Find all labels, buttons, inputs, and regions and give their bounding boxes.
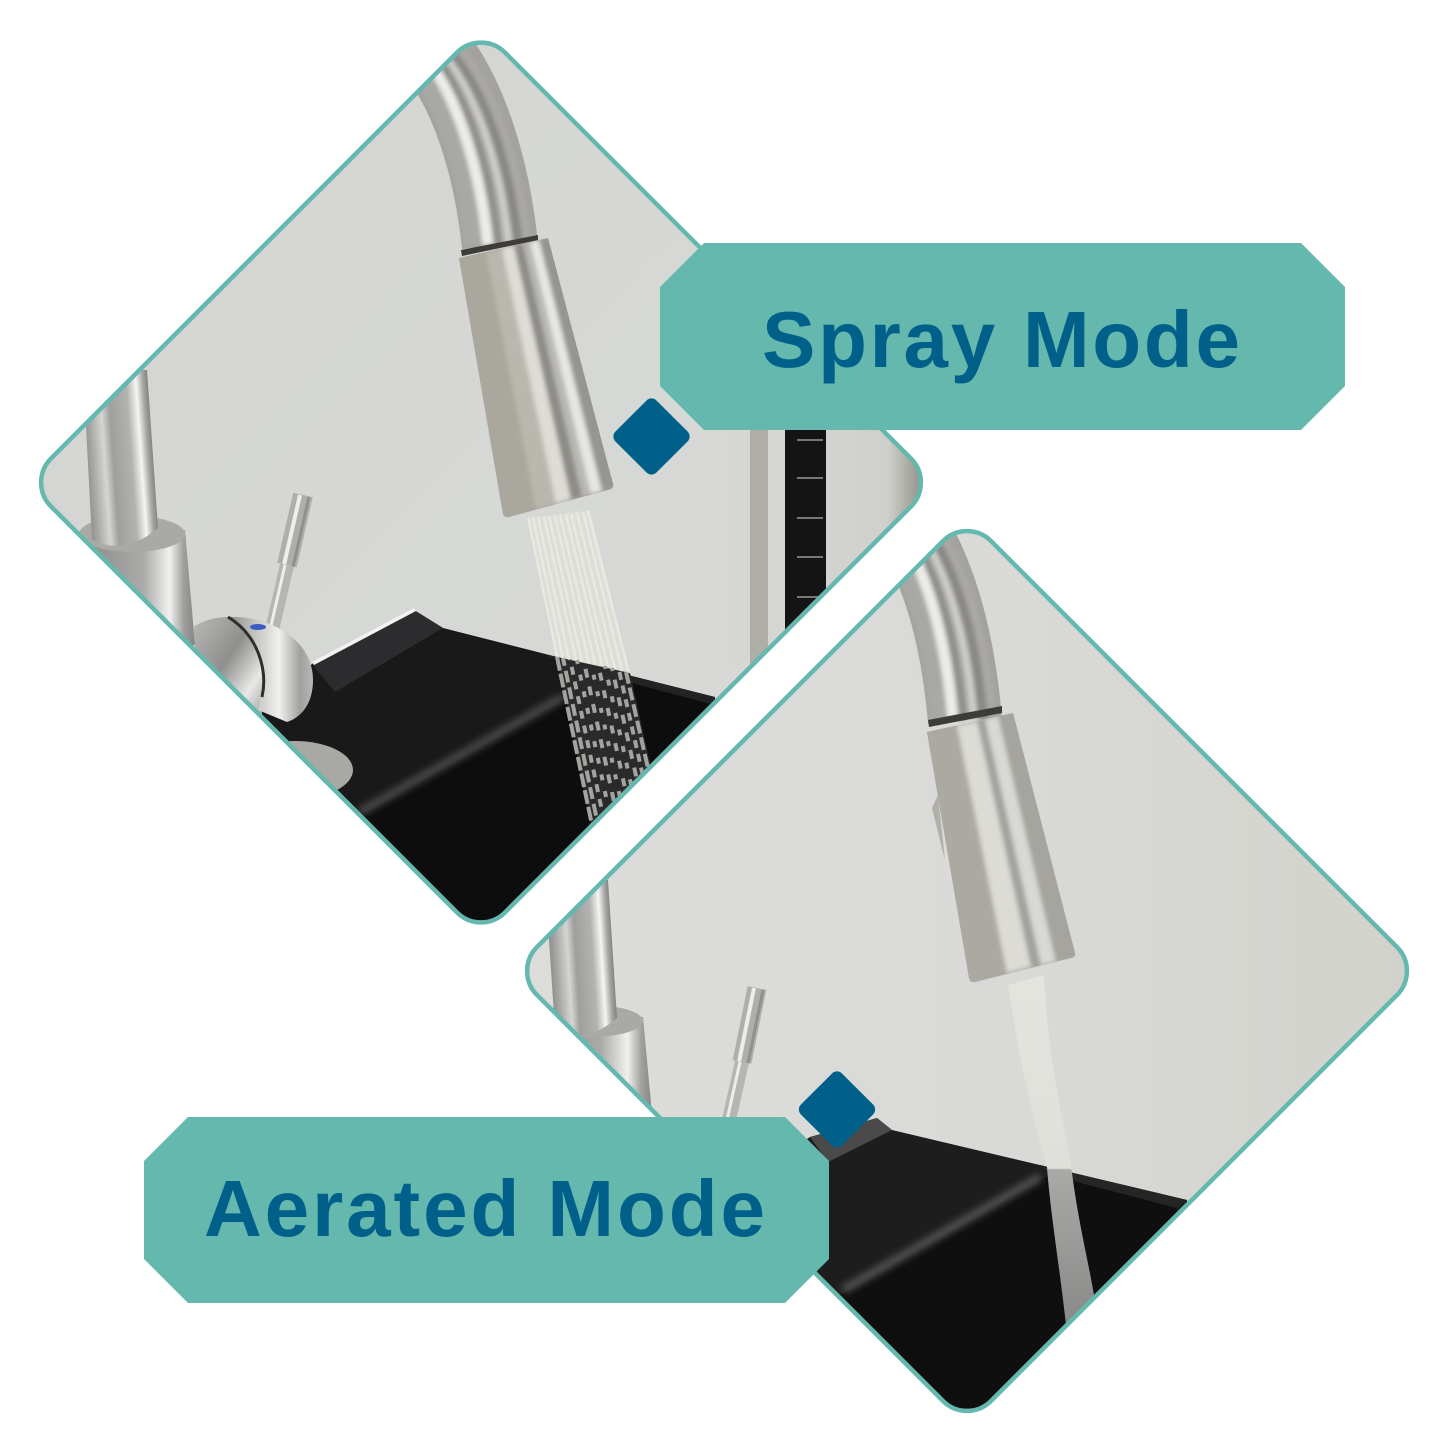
label: spray mode: Spray Mode [762,295,1240,384]
panel: aerated mode photo [513,517,1421,1425]
pole base [79,516,195,655]
back post [750,430,826,664]
trigger [932,795,945,860]
ring [461,235,538,256]
ring [928,706,1002,727]
aerated water stream [1008,975,1094,1325]
black sink [790,1118,1195,1420]
marker: aerated diamond [796,1068,878,1151]
handle lever [727,988,763,1120]
label: aerated mode [144,1117,829,1303]
pole base [581,1007,652,1106]
spout [900,535,1002,724]
nozzle [927,713,1076,982]
label: spray mode [660,243,1345,430]
label: aerated mode: Aerated Mode [204,1164,765,1253]
handle lever [270,495,309,630]
mixer hub [193,617,313,722]
drain plate [288,741,353,790]
left pole [545,880,617,1036]
left pole [83,370,158,546]
marker: spray diamond [610,395,693,478]
spray water [527,510,650,824]
black sink [250,608,722,930]
panel: spray mode photo [27,29,935,936]
spout [399,40,527,245]
nozzle [459,238,614,518]
